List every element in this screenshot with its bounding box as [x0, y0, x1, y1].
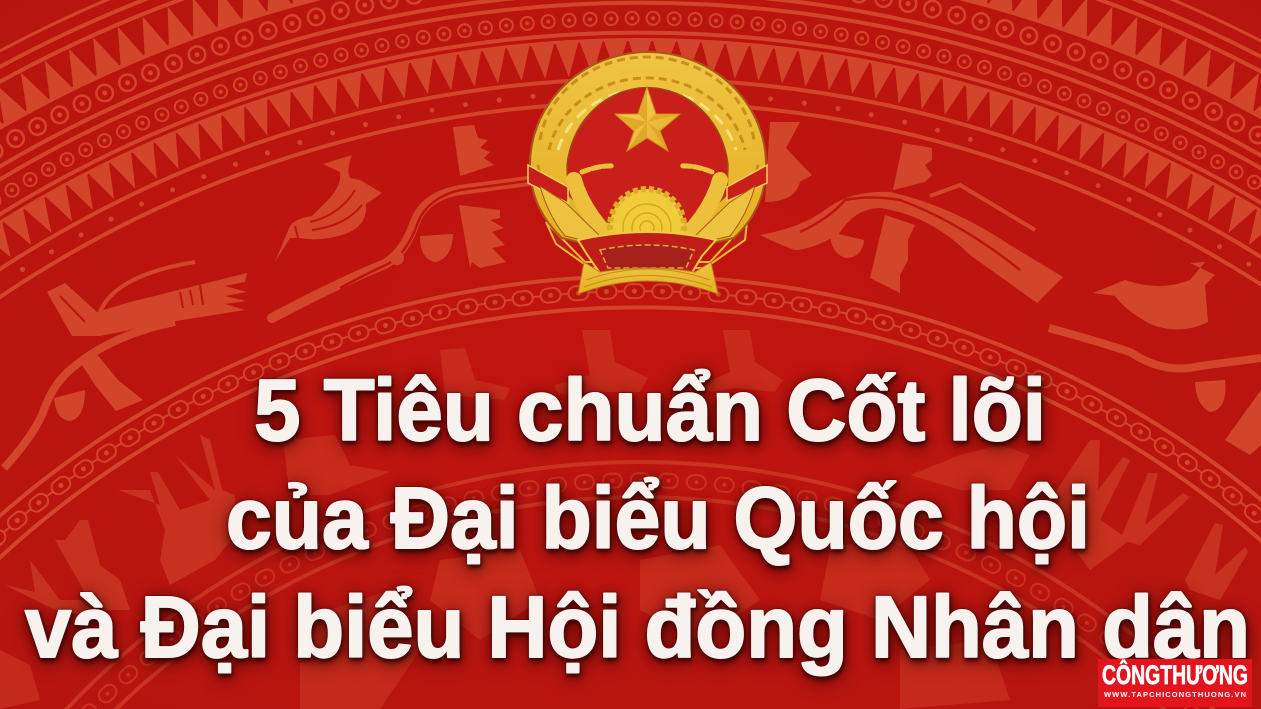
ring band outer	[0, 0, 1261, 151]
comb lower	[459, 205, 506, 268]
emblem: gold base	[578, 262, 718, 294]
chain band lower	[61, 462, 1219, 709]
comb upper	[453, 125, 494, 176]
long-beak bird left	[272, 181, 528, 318]
logo url: WWW.TAPCHICONGTHUONG.VN	[1104, 690, 1246, 699]
central figures behind title	[0, 330, 1030, 709]
emblem: star	[615, 87, 680, 151]
long-beak bird lower right	[1049, 328, 1261, 455]
bird right upper	[1093, 262, 1215, 330]
emblem: gold wreath ring	[530, 52, 766, 246]
logo: Công Thương	[1098, 659, 1252, 707]
bird left upper	[275, 155, 382, 262]
emblem: base lines	[584, 269, 712, 287]
triangle bands	[0, 0, 1261, 519]
emblem: red field	[567, 88, 728, 222]
emblem: side ribbons	[528, 165, 767, 203]
emblem: banner detail	[600, 245, 694, 268]
ring band inner	[0, 18, 1261, 201]
emblem: lower ribbon	[578, 232, 716, 276]
long-beak bird right	[760, 185, 1063, 303]
emblem: wreath lower wedges	[540, 186, 755, 242]
title	[25, 362, 1250, 676]
lower animal figures right	[1050, 440, 1248, 600]
bird near emblem right	[765, 122, 812, 202]
emblem: wreath leaf texture	[538, 57, 758, 232]
feather figure lower left	[4, 262, 247, 468]
emblem: rice sprays	[574, 166, 720, 234]
drum pattern: outer concentric arcs	[0, 0, 1261, 301]
combs right	[830, 143, 932, 293]
emblem: lower red ribbon backing	[546, 222, 747, 268]
cup left	[420, 234, 453, 262]
title line 2: của Đại biểu Quốc hội	[226, 470, 1090, 567]
national emblem of Vietnam	[528, 52, 767, 294]
emblem: cog wheel	[610, 189, 684, 263]
lower animal figures left	[5, 435, 235, 618]
chain band upper	[0, 276, 1261, 563]
dot band	[0, 91, 1261, 288]
emblem: wreath highlight	[558, 89, 736, 150]
title line 1: 5 Tiêu chuẩn Cốt lõi	[254, 362, 1046, 459]
